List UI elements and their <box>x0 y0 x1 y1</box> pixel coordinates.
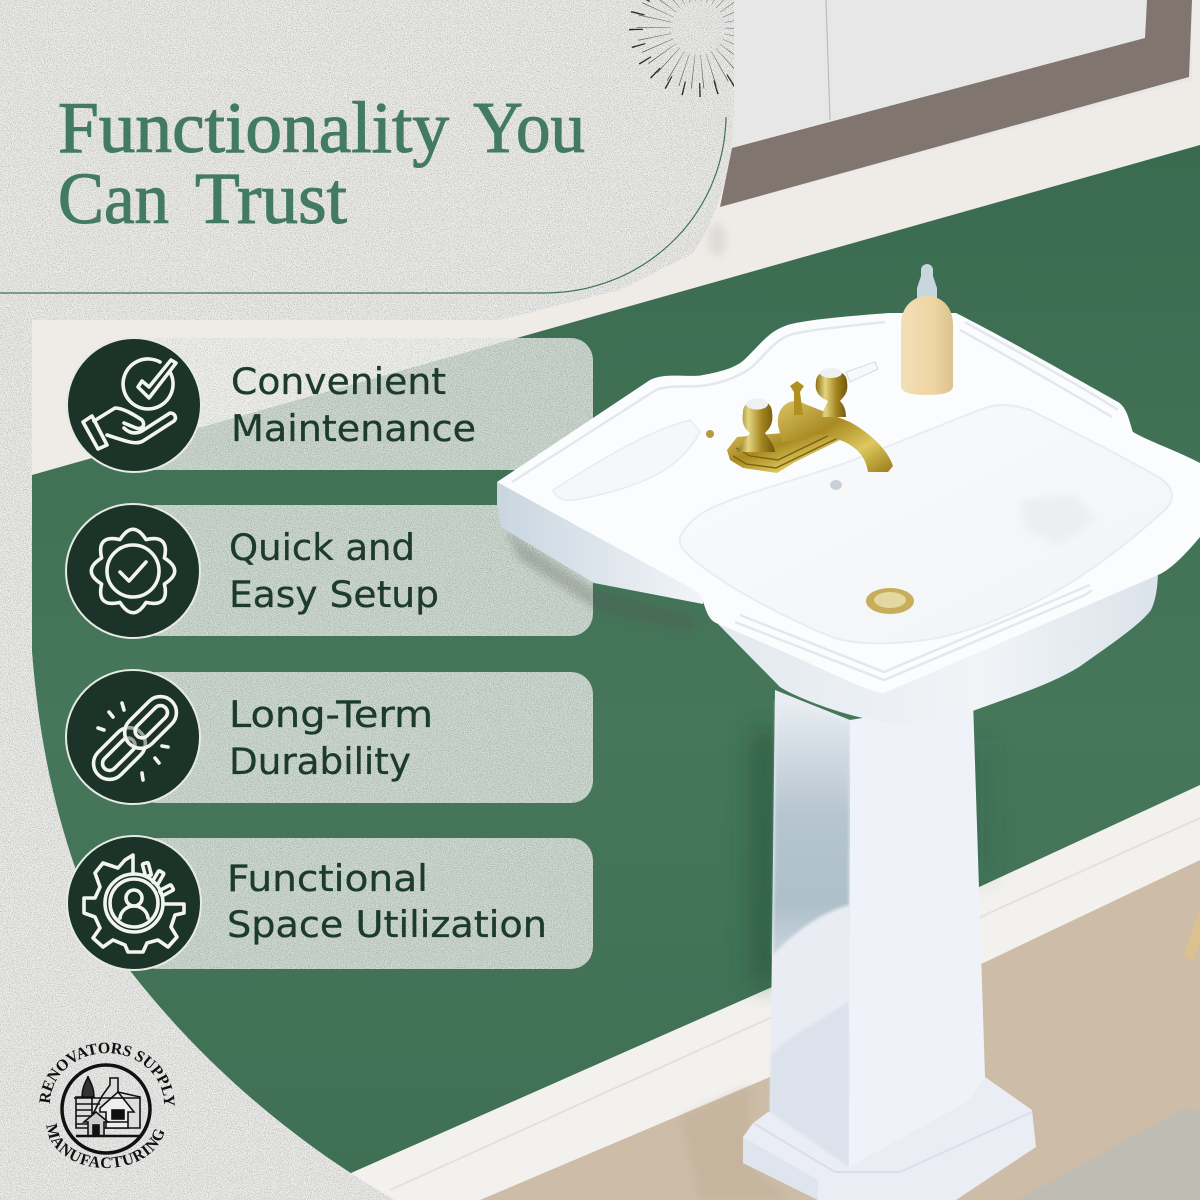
card label: Functional <box>227 857 428 900</box>
card label: Durability <box>229 740 411 783</box>
gold faucet <box>727 368 893 473</box>
feature card: Convenient Maintenance <box>67 338 593 472</box>
pedestal <box>743 690 1036 1200</box>
sink front face <box>497 482 703 604</box>
icon badge <box>67 338 201 472</box>
title: You <box>473 87 585 168</box>
card background <box>134 505 593 636</box>
base left face <box>743 1137 818 1200</box>
logo bottom text <box>47 1125 165 1168</box>
logo top text <box>50 1053 164 1104</box>
mounting screw <box>706 430 714 438</box>
sink rim <box>497 313 1200 693</box>
sink shadow on cards <box>505 530 700 632</box>
card label: Convenient <box>231 360 446 403</box>
card background <box>134 838 593 969</box>
title: Can <box>58 158 169 239</box>
card label: Maintenance <box>231 407 476 450</box>
rim mouldings <box>512 322 1118 680</box>
icon: gear with person <box>84 855 184 952</box>
bowl shade <box>1020 495 1095 545</box>
icon badge <box>67 836 201 970</box>
feature card: Quick and Easy Setup <box>66 504 593 638</box>
icon: chain link <box>87 690 183 786</box>
title panel curved line <box>0 117 726 293</box>
floor <box>470 860 1200 1200</box>
base moulding <box>753 1112 1032 1172</box>
feature card: Long-Term Durability <box>66 670 593 804</box>
left handle <box>737 398 775 452</box>
sink underside <box>716 570 1158 723</box>
brand logo: MANUFACTURING <box>46 1122 164 1168</box>
white lever <box>846 362 878 382</box>
pedestal base <box>743 1077 1036 1200</box>
basin bowl <box>680 405 1172 644</box>
feature card: Functional Space Utilization <box>67 836 593 970</box>
card label <box>229 693 433 783</box>
pedestal shadows on wall <box>752 730 990 985</box>
card label <box>229 526 439 616</box>
soap dish <box>553 420 700 501</box>
baseboard <box>290 785 1200 1200</box>
logo house <box>74 1076 140 1136</box>
soap bottle <box>901 264 953 395</box>
card label <box>227 857 547 946</box>
card label: Space Utilization <box>227 903 547 946</box>
icon: hand holding check <box>83 359 176 449</box>
pedestal reflection <box>773 700 850 955</box>
pedestal left face <box>770 690 850 1167</box>
card label <box>231 360 476 450</box>
mirror frame <box>720 0 1192 207</box>
faucet spout <box>778 401 893 472</box>
card label: Quick and <box>229 526 415 569</box>
card background <box>134 338 593 470</box>
left curved panel <box>0 318 395 1200</box>
sunburst decoration <box>636 0 760 90</box>
overflow hole <box>830 480 842 490</box>
floor shadow beside base <box>680 1085 790 1200</box>
card background <box>134 672 593 803</box>
sink basin <box>497 264 1200 723</box>
card label: Long-Term <box>229 693 433 736</box>
brand logo: RENOVATORS SUPPLY <box>39 1042 175 1106</box>
chair leg <box>1184 908 1200 962</box>
card label: Easy Setup <box>229 573 439 616</box>
brand logo <box>39 1042 175 1168</box>
base steps <box>733 430 846 468</box>
logo ring <box>62 1065 150 1153</box>
icon: gear with check <box>91 529 175 613</box>
center knob <box>790 381 804 415</box>
drain <box>866 588 914 614</box>
right handle <box>816 368 847 417</box>
lower reflection <box>770 1000 849 1167</box>
corner shadow spot <box>708 224 726 256</box>
title: Functionality <box>58 87 449 168</box>
wall mirror panel <box>730 0 1192 205</box>
title <box>58 87 585 239</box>
pedestal right face <box>849 700 985 1167</box>
rug <box>1017 1108 1200 1200</box>
faucet base <box>727 428 848 473</box>
icon badge <box>66 670 200 804</box>
icon badge <box>66 504 200 638</box>
top title panel <box>0 0 734 660</box>
title: Trust <box>195 158 347 239</box>
